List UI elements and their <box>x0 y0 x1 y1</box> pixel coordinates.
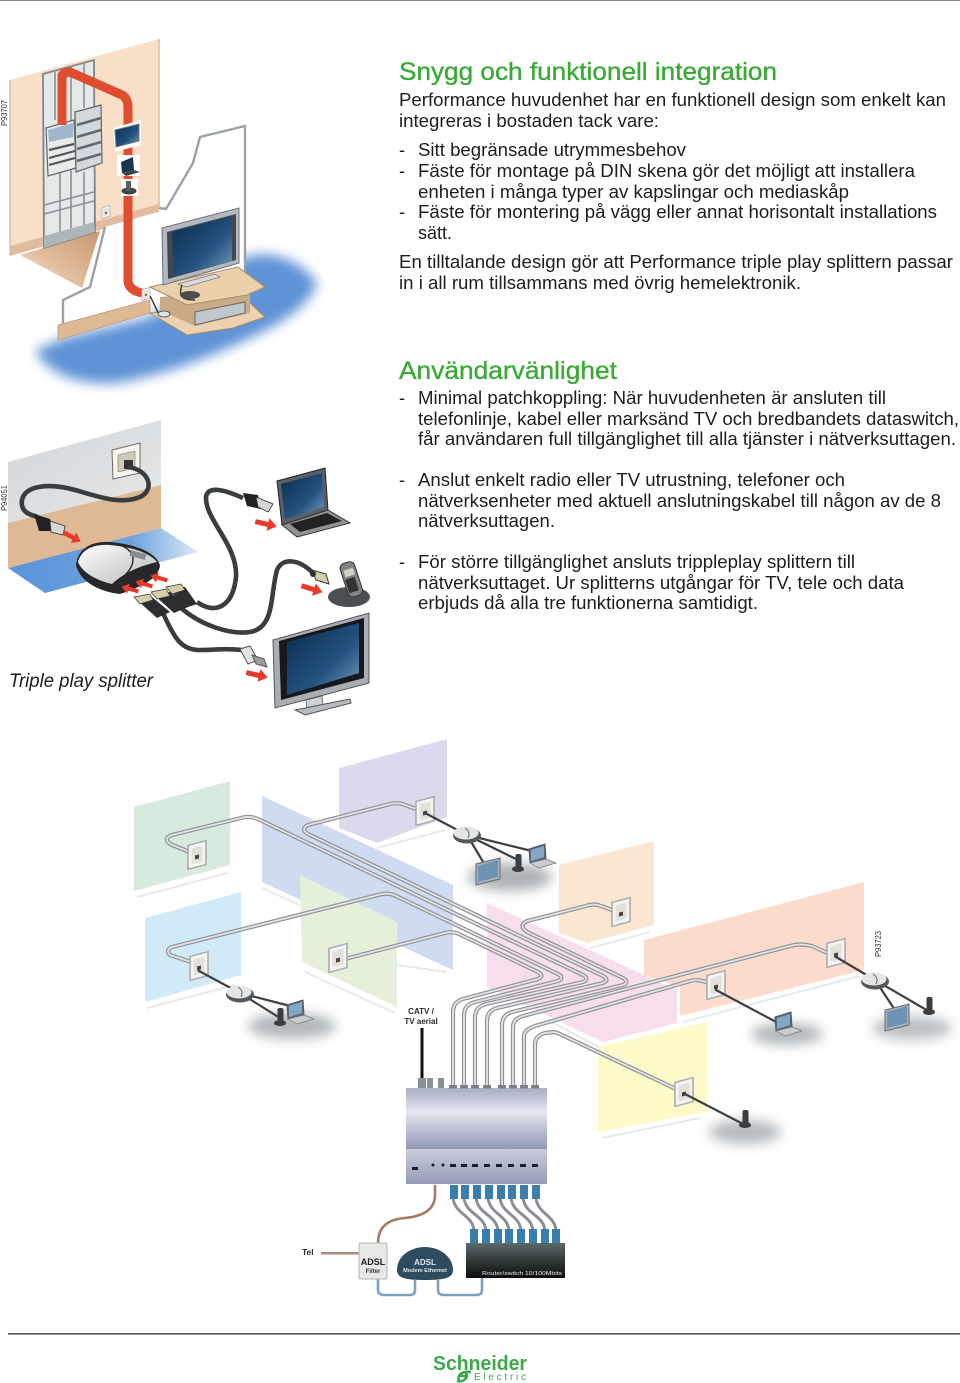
monitor <box>273 613 369 715</box>
text block: usability: får användaren full tillgänglighet till alla tjänster i nätverksuttagen. <box>418 429 956 449</box>
skirting strip <box>58 300 150 340</box>
room devices: salmon splitter <box>861 972 935 1031</box>
text block: integration: Sitt begränsade utrymmesbehov <box>418 140 687 160</box>
arrow port two <box>134 577 154 591</box>
text block: integration <box>399 90 953 293</box>
cables inner <box>167 803 832 1089</box>
tel cable <box>321 1252 359 1254</box>
blue connectors top <box>450 1185 540 1199</box>
arrow to tv <box>245 666 269 684</box>
heading: integration: Snygg och funktionell integration <box>399 58 777 86</box>
text block: usability: nätverksuttaget. Ur splitterns utgångar för TV, tele och data <box>418 573 905 593</box>
furniture lower shelf <box>150 303 265 335</box>
cable to tv <box>163 613 242 650</box>
ADSL filter: Filter <box>366 1269 381 1275</box>
plug at laptop <box>243 493 273 512</box>
screen icon <box>113 120 141 152</box>
text block: integration: - <box>399 202 405 222</box>
text block: integration: Performance huvudenhet har en funktionell design som enkelt kan <box>399 90 946 110</box>
room device: yellow phone <box>739 1110 751 1128</box>
text block: integration: Fäste för montage på DIN skena gör det möjligt att installera <box>418 161 916 181</box>
label: CATV / TV aerial: CATV / <box>408 1007 435 1016</box>
room devices: purple <box>453 826 556 885</box>
splitter device <box>76 542 160 594</box>
arrow port three <box>149 571 169 585</box>
room devices: salmon laptop <box>775 1012 802 1036</box>
wall skirting band <box>10 204 159 256</box>
wall socket <box>112 443 140 479</box>
code P94051: P94051 <box>0 484 9 511</box>
partition wall <box>63 126 245 325</box>
aerial connectors <box>418 1078 444 1089</box>
cable to laptop <box>197 490 243 608</box>
floor shadows <box>248 863 952 1144</box>
text block: integration: - <box>399 161 405 181</box>
blue floor <box>35 255 317 383</box>
logo: Schneider Electric: Electric <box>474 1372 526 1383</box>
service cabinet <box>43 60 102 248</box>
plug <box>34 514 65 535</box>
illustration: room integration <box>0 39 317 383</box>
bottom rule <box>8 1333 960 1335</box>
wall socket tv <box>142 288 150 300</box>
partition outline <box>63 126 245 326</box>
room panels <box>134 739 864 1132</box>
wall <box>8 420 161 523</box>
hub ports <box>412 1164 538 1170</box>
text block: usability: Anslut enkelt radio eller TV utrustning, telefoner och <box>418 470 845 490</box>
text block: usability: erbjuds då alla tre funktionerna samtidigt. <box>418 593 758 613</box>
copper cable <box>378 1185 435 1243</box>
wall socket <box>102 206 110 218</box>
label: Tel: Tel <box>302 1247 314 1257</box>
laptop icon <box>117 155 140 176</box>
arrow to laptop <box>254 515 278 533</box>
code P93723: P93723 <box>874 930 883 957</box>
cables outer <box>167 803 832 1089</box>
small splitter and cables <box>150 285 200 317</box>
wall edge <box>10 39 159 255</box>
text block: integration: integreras i bostaden tack vare: <box>399 111 659 131</box>
wall sockets <box>188 797 845 1106</box>
laptop <box>277 468 350 537</box>
device cables <box>199 813 930 1125</box>
arrows into ports <box>120 582 140 596</box>
cordless phone <box>328 560 370 607</box>
arrow to phone <box>300 580 324 598</box>
phone icon <box>121 179 138 196</box>
furniture cabinet <box>160 290 250 326</box>
arrow into splitter <box>61 527 83 547</box>
network diagram <box>134 739 952 1295</box>
three plugs <box>134 584 197 618</box>
cable to phone <box>180 561 313 633</box>
text block: usability: För större tillgänglighet ansluts trippleplay splittern till <box>418 552 855 572</box>
dvd unit <box>195 302 245 325</box>
caption: triple play splitter: Triple play splitter <box>9 671 154 692</box>
red cable ribbon <box>62 72 142 293</box>
blue link cables <box>378 1278 482 1295</box>
text block: usability: Minimal patchkoppling: När huvudenheten är ansluten till <box>418 388 886 408</box>
text block: usability: - <box>399 552 405 572</box>
distribution module right <box>75 105 102 172</box>
label: CATV / TV aerial <box>404 1007 438 1026</box>
text block: usability: - <box>399 388 405 408</box>
hub: distribution unit <box>406 1085 547 1184</box>
ADSL modem: ADSL <box>414 1258 436 1267</box>
logo: Schneider Electric: Schneider <box>433 1352 527 1375</box>
logo mark <box>457 1372 471 1381</box>
router switch <box>466 1229 565 1278</box>
code P93707: P93707 <box>0 99 9 126</box>
aerial cable <box>420 1028 424 1080</box>
label: CATV / TV aerial: TV aerial <box>404 1017 438 1026</box>
wall cable <box>22 467 149 517</box>
ADSL modem <box>397 1247 453 1280</box>
ADSL modem: Modem Ethernet <box>403 1268 447 1274</box>
patch cables <box>453 1198 556 1232</box>
ADSL filter <box>359 1243 387 1279</box>
top rule <box>0 0 960 1</box>
tv plug <box>240 646 267 667</box>
wood floor <box>20 231 100 288</box>
blue floor <box>8 528 198 593</box>
text block: usability: telefonlinje, kabel eller marksänd TV och bredbandets dataswitch, <box>418 409 959 429</box>
baseboard <box>8 485 161 568</box>
plug at phone <box>310 570 329 584</box>
text block: integration: sätt. <box>418 223 452 243</box>
furniture top shelf <box>150 267 265 305</box>
text block: usability: - <box>399 470 405 490</box>
distribution module left <box>46 120 76 176</box>
ADSL filter: ADSL <box>361 1257 386 1267</box>
floor lines <box>137 830 860 1138</box>
wall <box>10 39 159 255</box>
room devices: blue <box>226 986 314 1026</box>
text block: usability: nätverksuttagen. <box>418 511 555 531</box>
text block: integration: - <box>399 140 405 160</box>
text block: usability: nätverksenheter med aktuell anslutningskabel till någon av de 8 <box>418 491 941 511</box>
text block: usability <box>399 388 959 613</box>
text block: integration: Fäste för montering på vägg eller annat horisontalt installations <box>418 202 937 222</box>
television <box>162 208 239 287</box>
heading: usability: Användarvänlighet <box>399 357 617 385</box>
text block: integration: En tilltalande design gör att Performance triple play splittern passar <box>399 252 953 272</box>
hub top cable feet <box>449 1085 539 1088</box>
router switch: Router/switch 10/100Mbits <box>482 1271 562 1277</box>
illustration: triple play splitter <box>0 420 370 715</box>
text block: integration: in i all rum tillsammans med övrig hemelektronik. <box>399 273 801 293</box>
text block: integration: enheten i många typer av kapslingar och mediaskåp <box>418 182 849 202</box>
